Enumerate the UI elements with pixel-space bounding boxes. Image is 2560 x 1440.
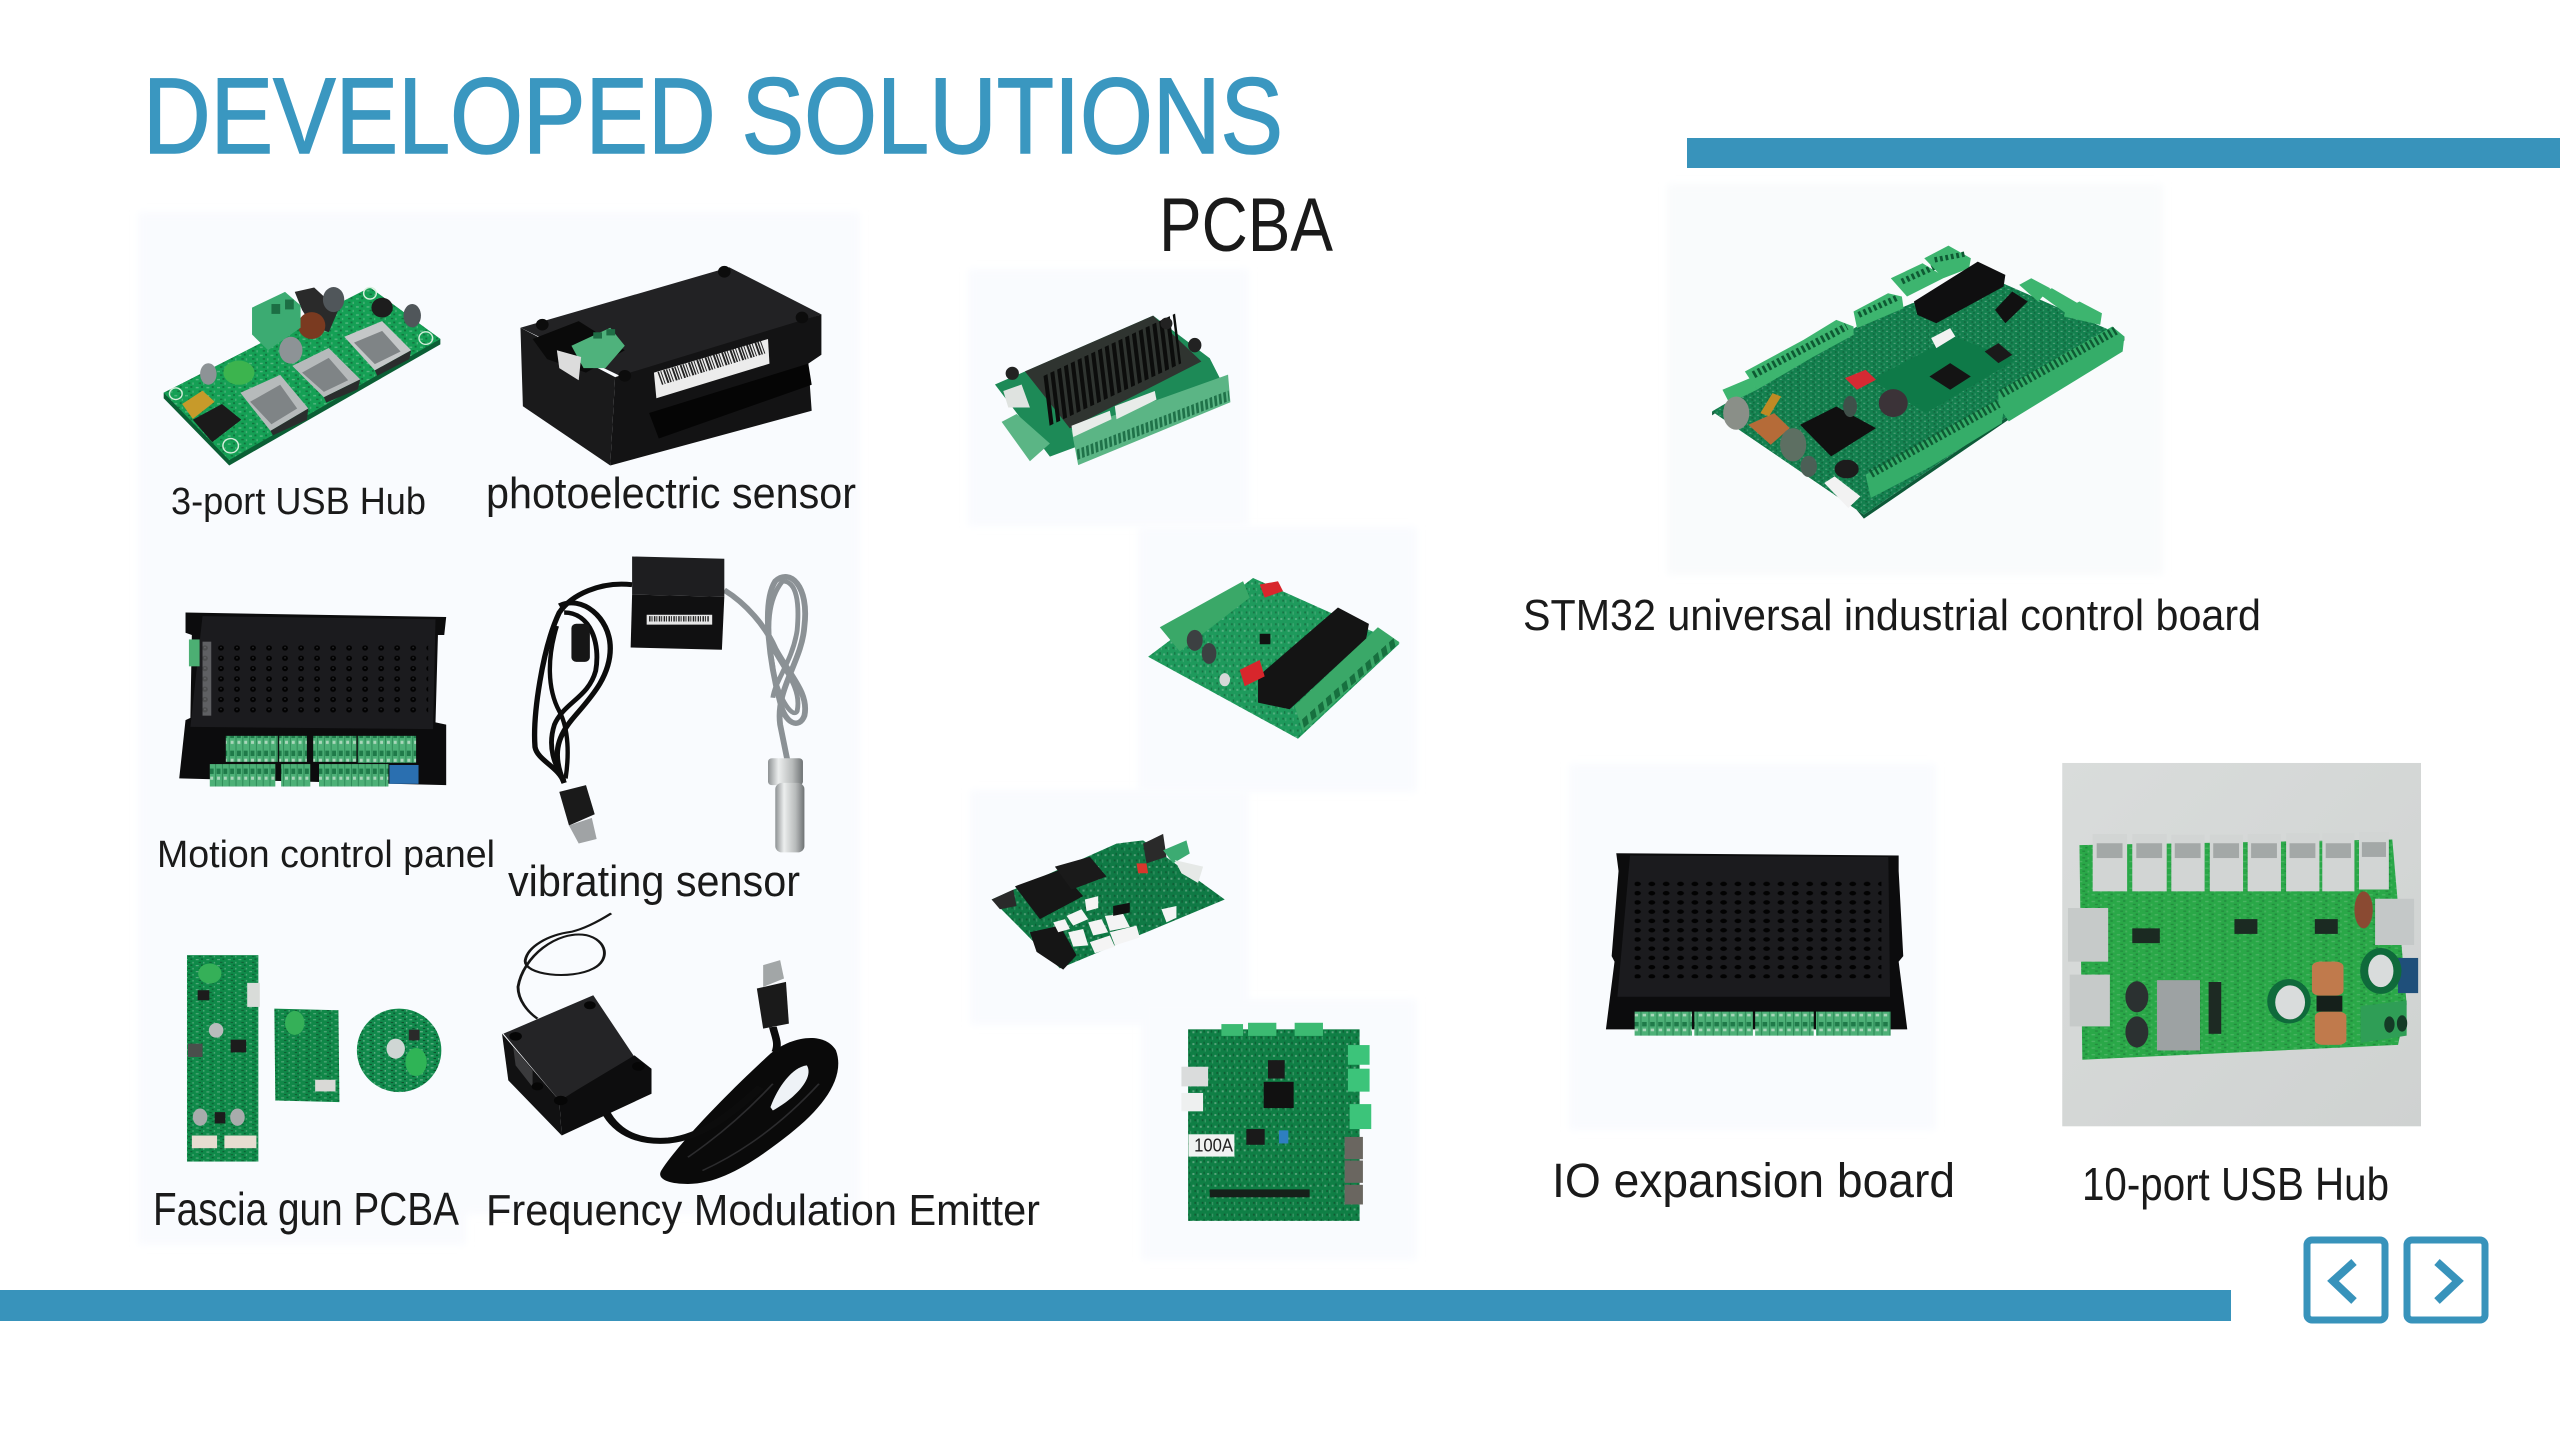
panel: PCBA photo C background [970, 790, 1249, 1025]
product: vibrating sensor [535, 556, 805, 852]
label: photoelectric sensor: photoelectric sensor [486, 469, 856, 518]
board label text: 100A [1194, 1136, 1233, 1156]
panel: IO expansion board photo background [1569, 764, 1936, 1130]
button: next arrow [2407, 1240, 2485, 1320]
panel: PCBA photo A background [968, 269, 1249, 526]
label: Frequency Modulation Emitter: Frequency Modulation Emitter [486, 1186, 1040, 1235]
product: photoelectric sensor [520, 266, 821, 465]
panel: PCBA photo D background [1141, 999, 1417, 1260]
product: control PCBA with white blocks [992, 834, 1225, 970]
label: Fascia gun PCBA: Fascia gun PCBA [153, 1183, 459, 1235]
label: IO expansion board: IO expansion board [1552, 1155, 1955, 1208]
button: previous arrow [2307, 1240, 2385, 1320]
title: DEVELOPED SOLUTIONS [143, 55, 1283, 176]
product: relay PCBA board [1148, 578, 1400, 739]
product: STM32 universal industrial control board [1712, 246, 2124, 519]
label: Motion control panel: Motion control panel [157, 834, 495, 876]
product: frequency modulation emitter [502, 913, 838, 1184]
product: 10-port USB hub photo [2062, 763, 2421, 1126]
subtitle: PCBA: PCBA [1159, 183, 1333, 268]
label: STM32 universal industrial control board: STM32 universal industrial control board [1523, 591, 2261, 640]
top accent bar [1687, 138, 2560, 168]
bottom accent bar [0, 1290, 2231, 1321]
product: IO expansion board [1606, 853, 1907, 1036]
label: 10-port USB Hub: 10-port USB Hub [2082, 1158, 2389, 1210]
panel: PCBA photo B background [1138, 527, 1417, 792]
product: heatsink PCBA board [995, 316, 1230, 465]
label: vibrating sensor: vibrating sensor [508, 857, 800, 906]
panel: STM32 photo background [1667, 184, 2163, 575]
product: 3-port USB hub [164, 287, 440, 465]
product: fascia gun PCBA [187, 955, 441, 1162]
label: 3-port USB Hub: 3-port USB Hub [171, 481, 426, 523]
product: 100A control board [1181, 1023, 1371, 1221]
product: motion control panel [179, 613, 446, 787]
panel: left product collage background [138, 212, 860, 1245]
